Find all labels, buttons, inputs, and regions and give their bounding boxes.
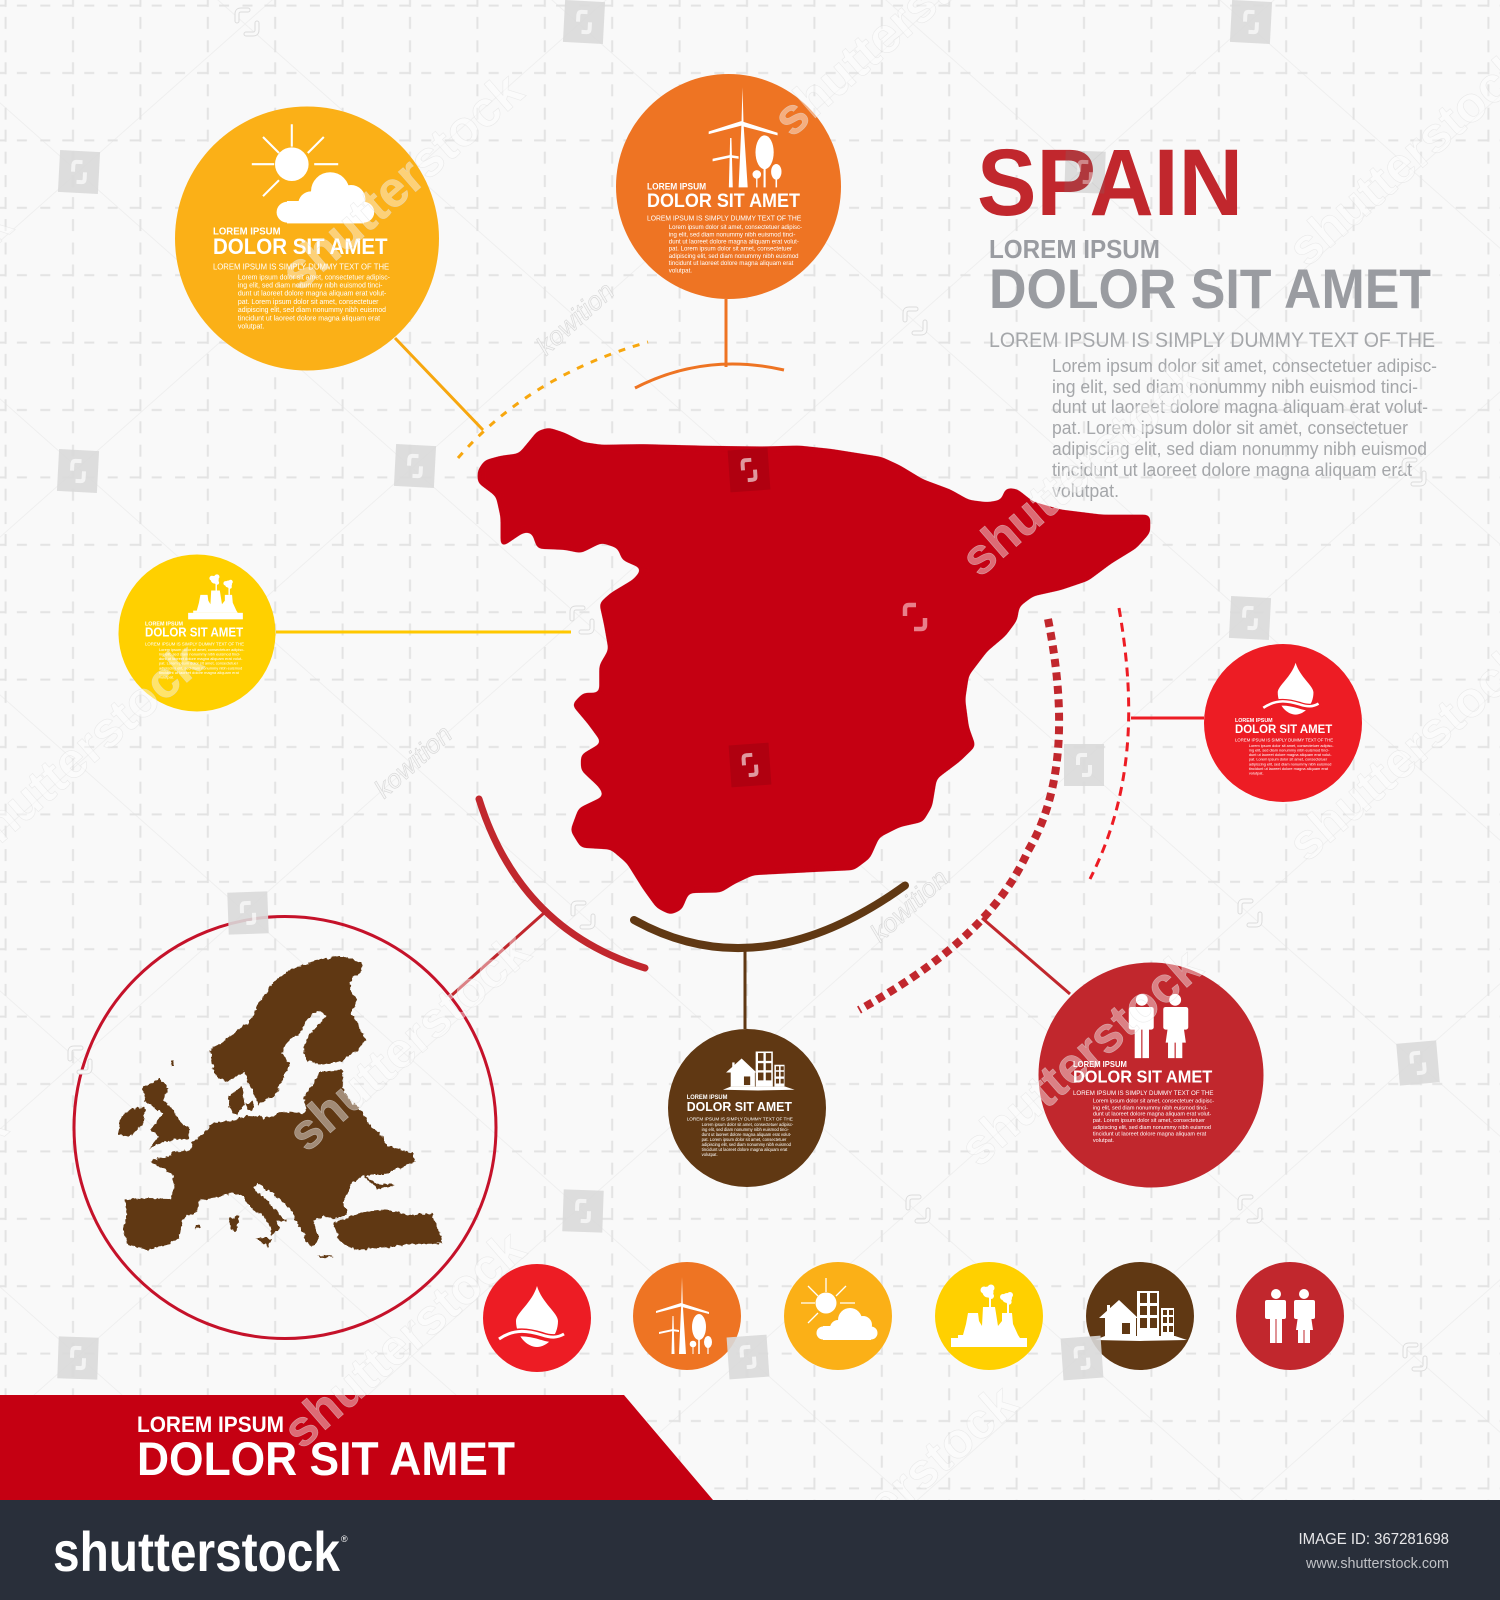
text block: adipiscing elit, sed diam nonummy nibh euismod — [238, 306, 386, 314]
text block: LOREM IPSUM — [213, 226, 281, 237]
text block: dunt ut laoreet dolore magna aliquam erat volut- — [669, 238, 799, 245]
text block: tincidunt ut laoreet dolore magna aliquam erat — [238, 314, 380, 322]
text block: DOLOR SIT AMET — [1235, 722, 1333, 736]
text block: volutpat. — [1093, 1138, 1114, 1144]
watermark text: shutterstock — [270, 61, 534, 301]
text block — [687, 1094, 794, 1157]
connector: gold line and dotted arc — [395, 338, 648, 458]
text block: adipiscing elit, sed diam nonummy nibh euismod — [1093, 1125, 1211, 1131]
text block: Lorem ipsum dolor sit amet, consectetuer adipisc- — [669, 224, 802, 231]
icon: row sun and cloud — [784, 1262, 892, 1370]
text block: ing elit, sed diam nonummy nibh euismod tinci- — [159, 652, 241, 657]
text block: ing elit, sed diam nonummy nibh euismod tinci- — [1093, 1105, 1208, 1111]
text block: Lorem ipsum dolor sit amet, consectetuer adipisc- — [1249, 743, 1334, 748]
map: Spain — [478, 428, 1150, 915]
text block: header copy: pat. Lorem ipsum dolor sit amet, consectetuer — [1052, 418, 1408, 438]
text block: header copy: volutpat. — [1052, 481, 1119, 501]
connector: crimson arc to Europe circle — [452, 799, 645, 995]
text block: Lorem ipsum dolor sit amet, consectetuer adipisc- — [159, 647, 245, 652]
text block: Lorem ipsum dolor sit amet, consectetuer adipisc- — [238, 273, 391, 281]
text block — [1235, 718, 1334, 776]
footer image id: IMAGE ID: 367281698 — [1298, 1531, 1449, 1548]
map: Europe — [118, 957, 443, 1258]
banner heading — [137, 1412, 515, 1485]
text block: LOREM IPSUM — [1235, 718, 1273, 724]
icon: row water drop — [483, 1264, 591, 1372]
text block: ing elit, sed diam nonummy nibh euismod tinci- — [238, 282, 383, 290]
banner: bottom red ribbon — [0, 1395, 713, 1500]
panel: Europe locator circle — [74, 916, 496, 1338]
title: SPAIN: SPAIN — [977, 130, 1243, 236]
text block: DOLOR SIT AMET — [647, 190, 800, 212]
text block: dunt ut laoreet dolore magna aliquam erat volut- — [702, 1132, 792, 1137]
watermark text: shutterstock — [949, 937, 1213, 1177]
watermark text: shutterstock — [272, 1219, 536, 1459]
text block: header copy: adipiscing elit, sed diam nonummy nibh euismod — [1052, 439, 1427, 459]
text block: DOLOR SIT AMET — [687, 1099, 792, 1114]
text block: dunt ut laoreet dolore magna aliquam erat volut- — [1093, 1112, 1211, 1118]
text block: tincidunt ut laoreet dolore magna aliquam erat — [1249, 766, 1329, 771]
text block — [213, 226, 391, 331]
connector: yellow line — [276, 630, 571, 634]
icon: row people — [1236, 1262, 1344, 1370]
icon: factory — [188, 574, 243, 619]
text block: ing elit, sed diam nonummy nibh euismod tinci- — [1249, 748, 1330, 753]
text block: pat. Lorem ipsum dolor sit amet, consectetuer — [159, 661, 239, 666]
text block: header copy: ing elit, sed diam nonummy nibh euismod tinci- — [1052, 377, 1418, 397]
text block: LOREM IPSUM IS SIMPLY DUMMY TEXT OF THE — [647, 213, 801, 222]
text block: pat. Lorem ipsum dolor sit amet, consectetuer — [1093, 1118, 1205, 1124]
icon: row factory — [935, 1262, 1043, 1370]
connector: orange line and arc — [635, 299, 784, 388]
watermark text: shutterstock — [950, 347, 1214, 587]
watermark text: shutterstock — [277, 922, 541, 1162]
text block: LOREM IPSUM — [687, 1094, 727, 1101]
panel: orange wind info circle — [616, 74, 841, 299]
text block: pat. Lorem ipsum dolor sit amet, consectetuer — [702, 1137, 787, 1142]
text block — [145, 622, 245, 680]
panel: yellow factory info circle — [118, 554, 276, 712]
footer logo: ® — [341, 1534, 348, 1544]
text block: volutpat. — [159, 675, 174, 680]
text block: pat. Lorem ipsum dolor sit amet, consectetuer — [238, 298, 379, 306]
text block: ing elit, sed diam nonummy nibh euismod tinci- — [702, 1127, 789, 1132]
icon: sun and cloud — [252, 124, 374, 223]
text block: adipiscing elit, sed diam nonummy nibh euismod — [669, 253, 799, 260]
watermark text: kowition — [864, 863, 954, 948]
text block: volutpat. — [702, 1152, 718, 1157]
footer bar — [0, 1500, 1500, 1600]
text block: DOLOR SIT AMET — [213, 234, 388, 259]
text block: DOLOR SIT AMET — [145, 626, 244, 640]
text block: LOREM IPSUM — [1073, 1060, 1127, 1069]
text block: volutpat. — [1249, 771, 1264, 776]
text block: header copy: DOLOR SIT AMET — [989, 257, 1431, 320]
text block: header copy: Lorem ipsum dolor sit amet, consectetuer adipisc- — [1052, 356, 1437, 376]
text block: LOREM IPSUM IS SIMPLY DUMMY TEXT OF THE — [1235, 738, 1333, 743]
text block: dunt ut laoreet dolore magna aliquam erat volut- — [238, 289, 387, 297]
icon: row wind turbines — [633, 1262, 741, 1370]
text block: tincidunt ut laoreet dolore magna aliquam erat — [1093, 1131, 1207, 1137]
banner heading: LOREM IPSUM — [137, 1412, 284, 1437]
connector: red line and dashed arc — [1090, 608, 1204, 879]
text block: LOREM IPSUM — [647, 182, 706, 192]
watermark stamps — [57, 0, 1440, 1380]
icon: water drop — [1262, 663, 1320, 715]
text block: volutpat. — [238, 323, 264, 331]
text block: Lorem ipsum dolor sit amet, consectetuer adipisc- — [702, 1122, 794, 1127]
panel: brown housing info circle — [668, 1029, 826, 1187]
text block: Lorem ipsum dolor sit amet, consectetuer adipisc- — [1093, 1099, 1214, 1105]
panel: crimson people info circle — [1038, 962, 1264, 1188]
text block: header copy — [989, 234, 1437, 501]
text block: adipiscing elit, sed diam nonummy nibh euismod — [1249, 761, 1331, 766]
footer url: www.shutterstock.com — [1305, 1555, 1449, 1572]
text block: LOREM IPSUM IS SIMPLY DUMMY TEXT OF THE — [213, 261, 390, 271]
footer logo: shutterstock — [53, 1520, 341, 1583]
text block: header copy: dunt ut laoreet dolore magna aliquam erat volut- — [1052, 397, 1428, 417]
panel: gold sun info circle — [175, 106, 439, 370]
text block: header copy: LOREM IPSUM — [989, 234, 1160, 264]
icon: wind turbines and trees — [709, 87, 782, 187]
icon: row house and buildings — [1086, 1262, 1194, 1370]
text block: tincidunt ut laoreet dolore magna aliquam erat — [669, 260, 794, 267]
text block: LOREM IPSUM IS SIMPLY DUMMY TEXT OF THE — [687, 1116, 793, 1122]
watermark text: kowition — [368, 719, 458, 804]
text block: LOREM IPSUM IS SIMPLY DUMMY TEXT OF THE — [1073, 1090, 1214, 1097]
text block: tincidunt ut laoreet dolore magna aliquam erat — [702, 1147, 788, 1152]
text block: adipiscing elit, sed diam nonummy nibh euismod — [702, 1142, 792, 1147]
text block: adipiscing elit, sed diam nonummy nibh euismod — [159, 665, 242, 670]
icon: house and buildings — [723, 1052, 795, 1090]
banner heading: DOLOR SIT AMET — [137, 1432, 515, 1485]
text block: pat. Lorem ipsum dolor sit amet, consectetuer — [1249, 757, 1328, 762]
text block: LOREM IPSUM — [145, 622, 183, 628]
panel: red water info circle — [1204, 644, 1362, 802]
text block: ing elit, sed diam nonummy nibh euismod tinci- — [669, 231, 795, 238]
text block: header copy: LOREM IPSUM IS SIMPLY DUMMY TEXT OF THE — [989, 329, 1435, 352]
text block: header copy: tincidunt ut laoreet dolore magna aliquam erat — [1052, 460, 1412, 480]
text block: dunt ut laoreet dolore magna aliquam erat volut- — [1249, 752, 1332, 757]
text block: pat. Lorem ipsum dolor sit amet, consectetuer — [669, 246, 792, 253]
connector: brown arc and line — [634, 886, 905, 1029]
text block — [1073, 1060, 1214, 1144]
text block: tincidunt ut laoreet dolore magna aliquam erat — [159, 670, 240, 675]
text block: dunt ut laoreet dolore magna aliquam erat volut- — [159, 656, 243, 661]
icon: people — [1129, 994, 1188, 1058]
text block: volutpat. — [669, 267, 692, 274]
text block: DOLOR SIT AMET — [1073, 1066, 1212, 1087]
connector: crimson thick dotted arc and line — [859, 619, 1070, 1010]
text block — [647, 182, 802, 274]
text block: LOREM IPSUM IS SIMPLY DUMMY TEXT OF THE — [145, 641, 244, 646]
watermark text: kowition — [530, 276, 620, 361]
